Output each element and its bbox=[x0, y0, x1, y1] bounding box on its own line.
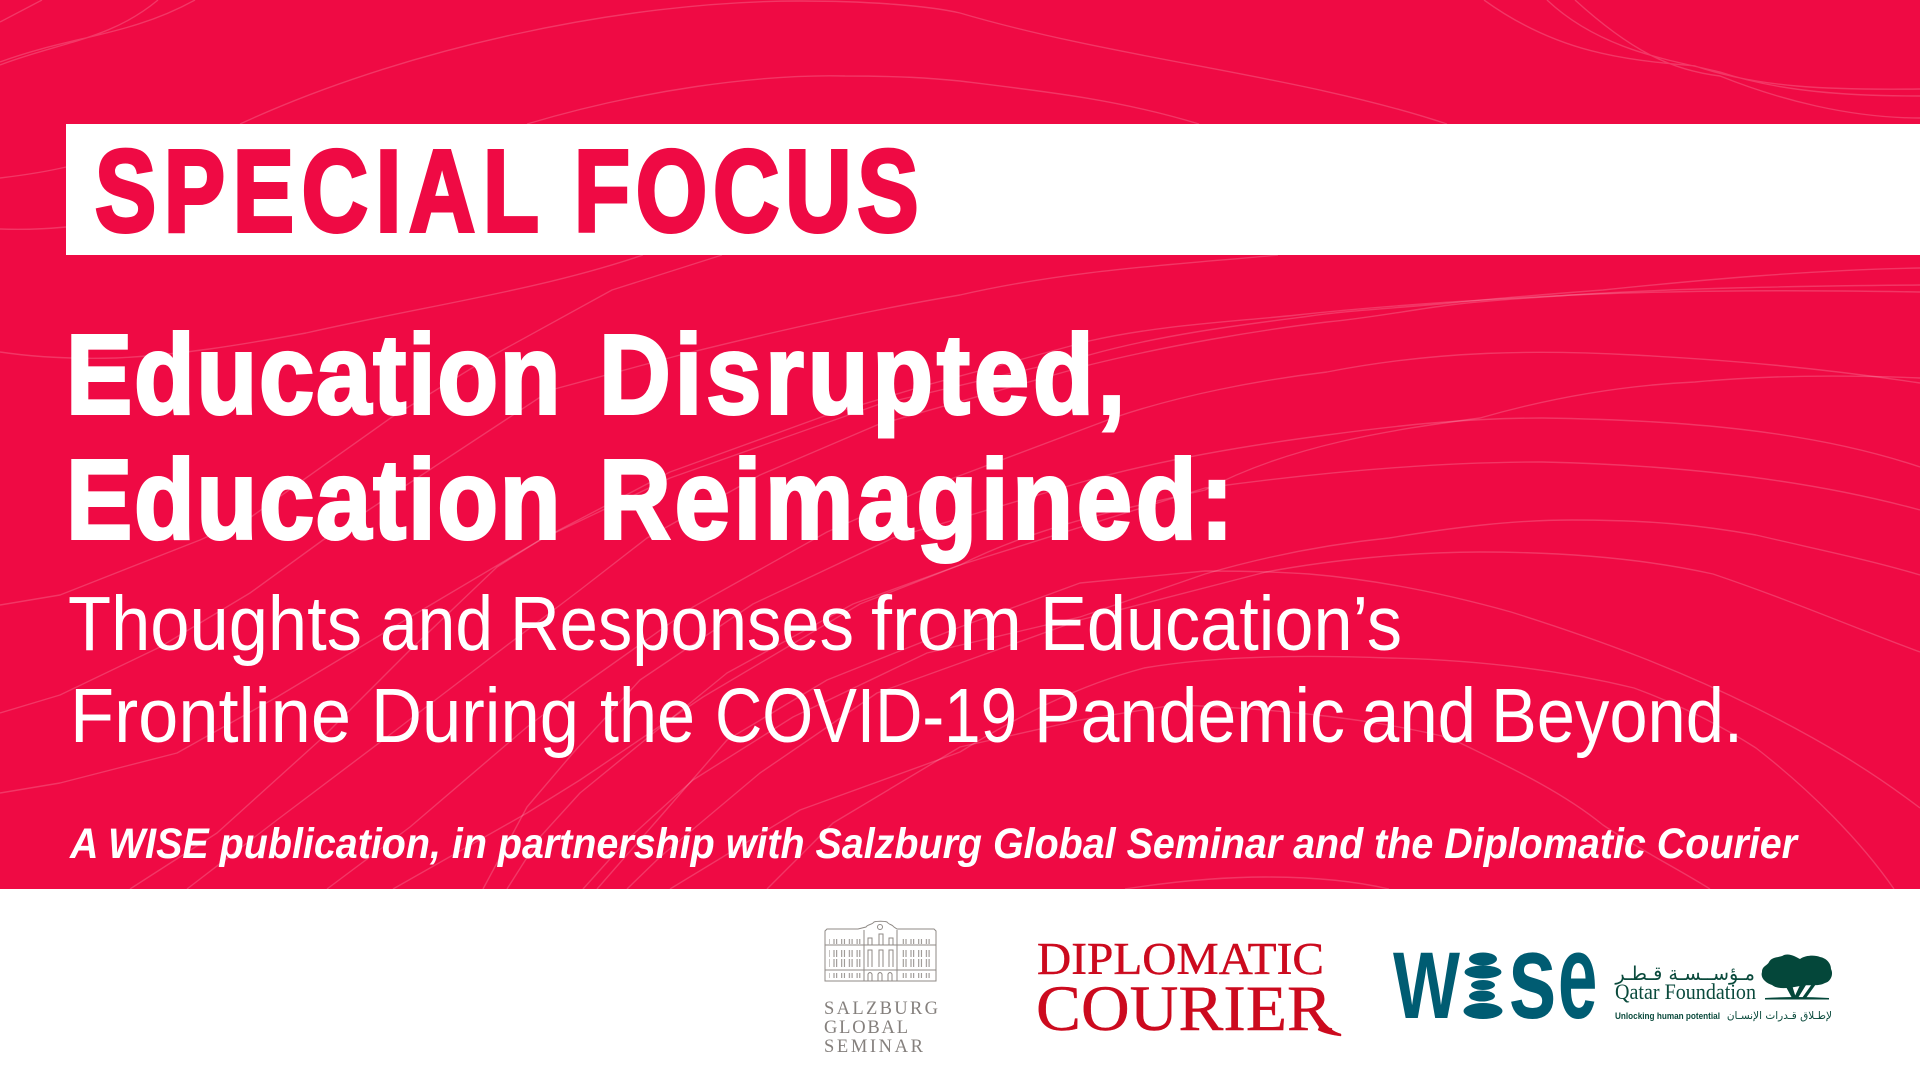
subtitle: two-line description: Education’s bbox=[1040, 581, 1402, 667]
title: two-line headline bbox=[66, 312, 1233, 563]
wordmark: SALZBURG GLOBAL SEMINAR: SALZBURG bbox=[824, 999, 938, 1019]
subtitle: two-line description: Pandemic bbox=[1034, 673, 1345, 759]
banner: white strip bbox=[66, 124, 1920, 255]
title: two-line headline: Disrupted, bbox=[599, 312, 1125, 438]
subtitle: two-line description: Thoughts bbox=[68, 581, 362, 667]
heading: SPECIAL FOCUS bbox=[95, 127, 918, 257]
logo: WISE bbox=[1393, 908, 1597, 1045]
logo: WISE: e bbox=[1558, 909, 1597, 1045]
logo: Diplomatic Courier: DIPLOMATIC bbox=[1037, 934, 1324, 984]
icon: tree bbox=[1762, 954, 1832, 1000]
subtitle: two-line description: the bbox=[600, 673, 695, 759]
logo: WISE: s bbox=[1508, 908, 1557, 1044]
subtitle: two-line description: and bbox=[380, 581, 493, 667]
tagline: publication credit: A WISE publication, in partnership with Salzburg Global Seminar and the Diplomatic Courier bbox=[69, 820, 1799, 868]
logo: Qatar Foundation: لإطـلاق قـدرات الإنسـان bbox=[1727, 1010, 1832, 1022]
logo: Diplomatic Courier bbox=[1036, 934, 1341, 1045]
logo: Qatar Foundation bbox=[1614, 954, 1832, 1022]
logo: Salzburg Global Seminar bbox=[824, 921, 938, 1057]
subtitle: two-line description: Beyond. bbox=[1491, 673, 1743, 759]
subtitle: two-line description: Frontline bbox=[70, 673, 351, 759]
logo: Qatar Foundation: Qatar Foundation bbox=[1615, 979, 1756, 1004]
heading: SPECIAL FOCUS: SPECIAL bbox=[95, 127, 539, 257]
subtitle: two-line description: from bbox=[871, 581, 1022, 667]
title: two-line headline: Education bbox=[66, 312, 561, 438]
icon: stacked stones forming the letter I bbox=[1464, 952, 1502, 1019]
icon: palace building bbox=[825, 921, 936, 981]
wordmark: SALZBURG GLOBAL SEMINAR: SEMINAR bbox=[824, 1037, 924, 1057]
title: two-line headline: Education bbox=[66, 437, 561, 563]
heading: SPECIAL FOCUS: FOCUS bbox=[574, 127, 918, 257]
subtitle: two-line description: During bbox=[371, 673, 579, 759]
subtitle: two-line description: COVID-19 bbox=[715, 673, 1017, 759]
wordmark: SALZBURG GLOBAL SEMINAR: GLOBAL bbox=[824, 1018, 908, 1038]
logo: Diplomatic Courier: COURIER bbox=[1036, 973, 1333, 1045]
subtitle: two-line description bbox=[68, 581, 1743, 759]
title: two-line headline: Reimagined: bbox=[599, 437, 1233, 563]
logo: Qatar Foundation: مـؤســسـة قـطـر bbox=[1614, 962, 1755, 985]
subtitle: two-line description: Responses bbox=[510, 581, 854, 667]
logo: Qatar Foundation: Unlocking human potential bbox=[1615, 1011, 1720, 1022]
wordmark: SALZBURG GLOBAL SEMINAR bbox=[824, 999, 938, 1057]
logo: WISE: W bbox=[1393, 933, 1460, 1039]
subtitle: two-line description: and bbox=[1361, 673, 1476, 759]
